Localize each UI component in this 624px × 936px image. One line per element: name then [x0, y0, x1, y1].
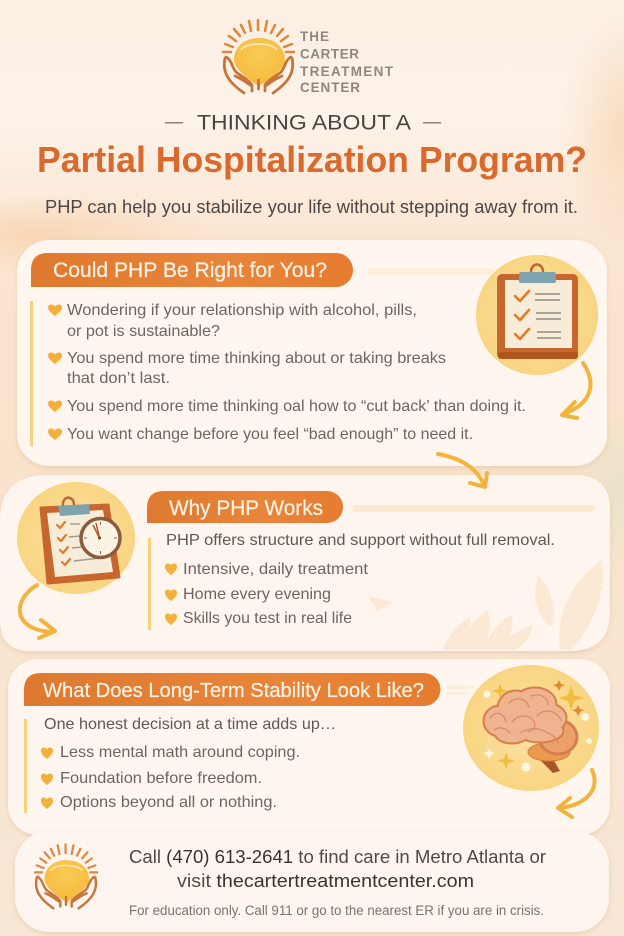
bullet list: why PHP works: Intensive, daily treatment	[183, 561, 369, 578]
bullet list: long-term stability: Options beyond all or nothing.	[60, 794, 277, 811]
bullet list: why PHP works: Home every evening	[183, 586, 331, 603]
bullet list: could PHP be right: that don’t last.	[67, 370, 170, 387]
arrow: brain to footer	[558, 770, 595, 817]
heading: could PHP be right for you: Could PHP Be Right for You?	[53, 258, 327, 282]
bullet list: why PHP works	[165, 561, 369, 627]
heading: could PHP be right for you	[31, 253, 353, 287]
heading: why PHP works	[147, 491, 343, 523]
logo wordmark: CENTER	[300, 80, 360, 95]
icon: clipboard and clock	[17, 482, 135, 594]
icon: footer sun in hands logo	[35, 844, 97, 908]
bullet list: could PHP be right: or pot is sustainable?	[67, 323, 220, 340]
panel: why PHP works	[0, 475, 610, 651]
icon: brain with sparkles	[463, 665, 599, 791]
arrow: clipboard to text	[562, 363, 590, 418]
bullet list: could PHP be right	[48, 302, 526, 443]
logo: The Carter Treatment Center	[223, 20, 394, 95]
icon: sun in hands	[223, 20, 294, 93]
panel: long-term stability	[8, 659, 610, 835]
text: website: visit thecartertreatmentcenter.com	[177, 870, 474, 891]
text: disclaimer: For education only. Call 911 or go to the nearest ER if you are in crisis.	[129, 903, 544, 918]
arrow: clipboard to text	[20, 585, 55, 638]
heading: long-term stability	[24, 673, 440, 706]
decorative leaves	[368, 560, 604, 650]
logo wordmark: CARTER	[300, 46, 359, 62]
logo wordmark	[300, 29, 394, 95]
bullet list: could PHP be right: You want change before you feel “bad enough” to need it.	[67, 426, 473, 443]
bullet list: could PHP be right: Wondering if your relationship with alcohol, pills,	[67, 302, 417, 319]
bullet list: why PHP works: Skills you test in real life	[183, 610, 352, 627]
logo wordmark: TREATMENT	[300, 64, 394, 79]
subtitle: PHP can help you stabilize your life without stepping away from it.	[45, 197, 578, 217]
heading: thinking about a: THINKING ABOUT A	[197, 112, 411, 134]
panel: call to action footer	[15, 831, 609, 932]
bullet list: long-term stability	[41, 744, 300, 811]
text: one honest decision: One honest decision at a time adds up…	[44, 716, 336, 733]
bullet list: long-term stability: Foundation before freedom.	[60, 770, 262, 787]
arrow: panel one to panel two	[438, 454, 487, 487]
logo wordmark: THE	[300, 29, 329, 44]
bullet list: could PHP be right: You spend more time thinking oal how to “cut back’ than doing it.	[67, 398, 526, 415]
icon: clipboard checklist	[476, 255, 598, 375]
text: PHP offers structure: PHP offers structure and support without full removal.	[166, 532, 555, 549]
text: call to action: Call (470) 613-2641 to find care in Metro Atlanta or	[129, 846, 546, 867]
title: Partial Hospitalization Program?	[37, 139, 587, 180]
panel: could PHP be right for you	[17, 240, 607, 466]
heading: long-term stability: What Does Long-Term Stability Look Like?	[43, 679, 424, 702]
bullet list: could PHP be right: You spend more time thinking about or taking breaks	[67, 350, 446, 367]
heading: why PHP works: Why PHP Works	[169, 496, 323, 520]
bullet list: long-term stability: Less mental math around coping.	[60, 744, 300, 761]
